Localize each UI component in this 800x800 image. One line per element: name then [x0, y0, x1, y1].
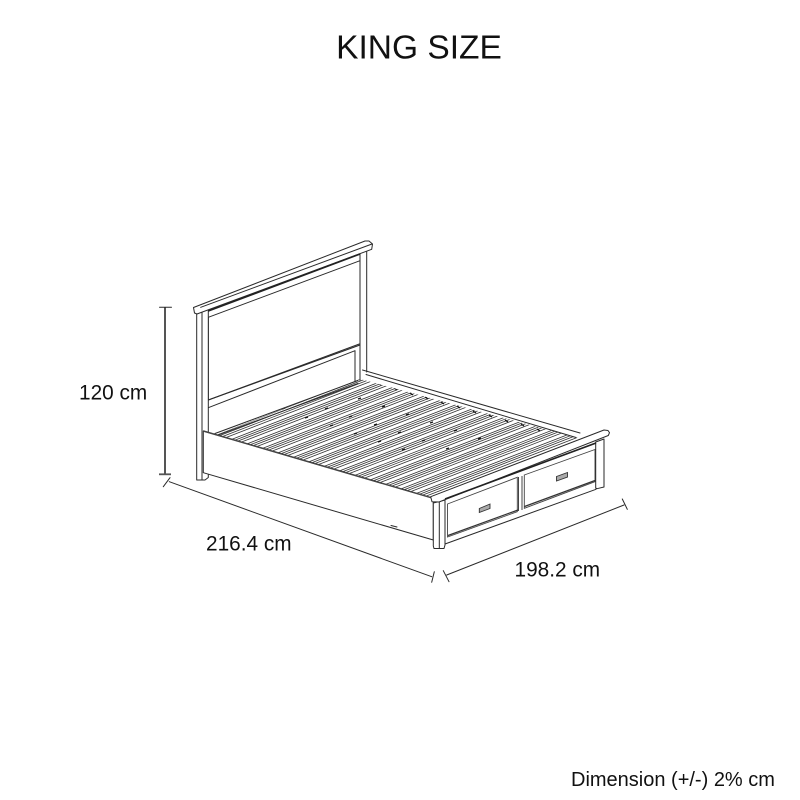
- headboard cap: [194, 241, 372, 314]
- length label: 216.4 cm: [206, 532, 292, 556]
- height dimension line: [159, 307, 172, 474]
- height label: 120 cm: [79, 382, 147, 404]
- right post: [360, 250, 367, 381]
- footboard: [431, 430, 610, 548]
- foot right post: [596, 439, 604, 489]
- drawer 2 handle: [556, 472, 568, 481]
- length dimension line: [163, 478, 434, 582]
- headboard lower rail: [208, 344, 359, 408]
- width dimension line: [443, 499, 627, 582]
- near side rail: [203, 431, 433, 540]
- headboard-side rail: [215, 380, 358, 435]
- title: KING SIZE: [336, 30, 502, 66]
- left post: [197, 309, 208, 480]
- headboard panel: [208, 261, 360, 400]
- slats: [218, 379, 578, 496]
- foot left post: [433, 500, 445, 548]
- drawer 1 handle: [479, 504, 490, 512]
- headboard: [194, 241, 372, 480]
- bed illustration: [194, 241, 611, 548]
- foot cap: [431, 430, 610, 502]
- slat fixings: [282, 383, 540, 450]
- far side rail: [362, 370, 580, 438]
- drawer divider: [518, 476, 522, 511]
- drawer 1: [448, 477, 518, 537]
- tolerance note: Dimension (+/-) 2% cm: [571, 769, 775, 791]
- foot rail panel: [445, 443, 596, 544]
- width label: 198.2 cm: [514, 558, 600, 582]
- drawer 2: [524, 450, 595, 508]
